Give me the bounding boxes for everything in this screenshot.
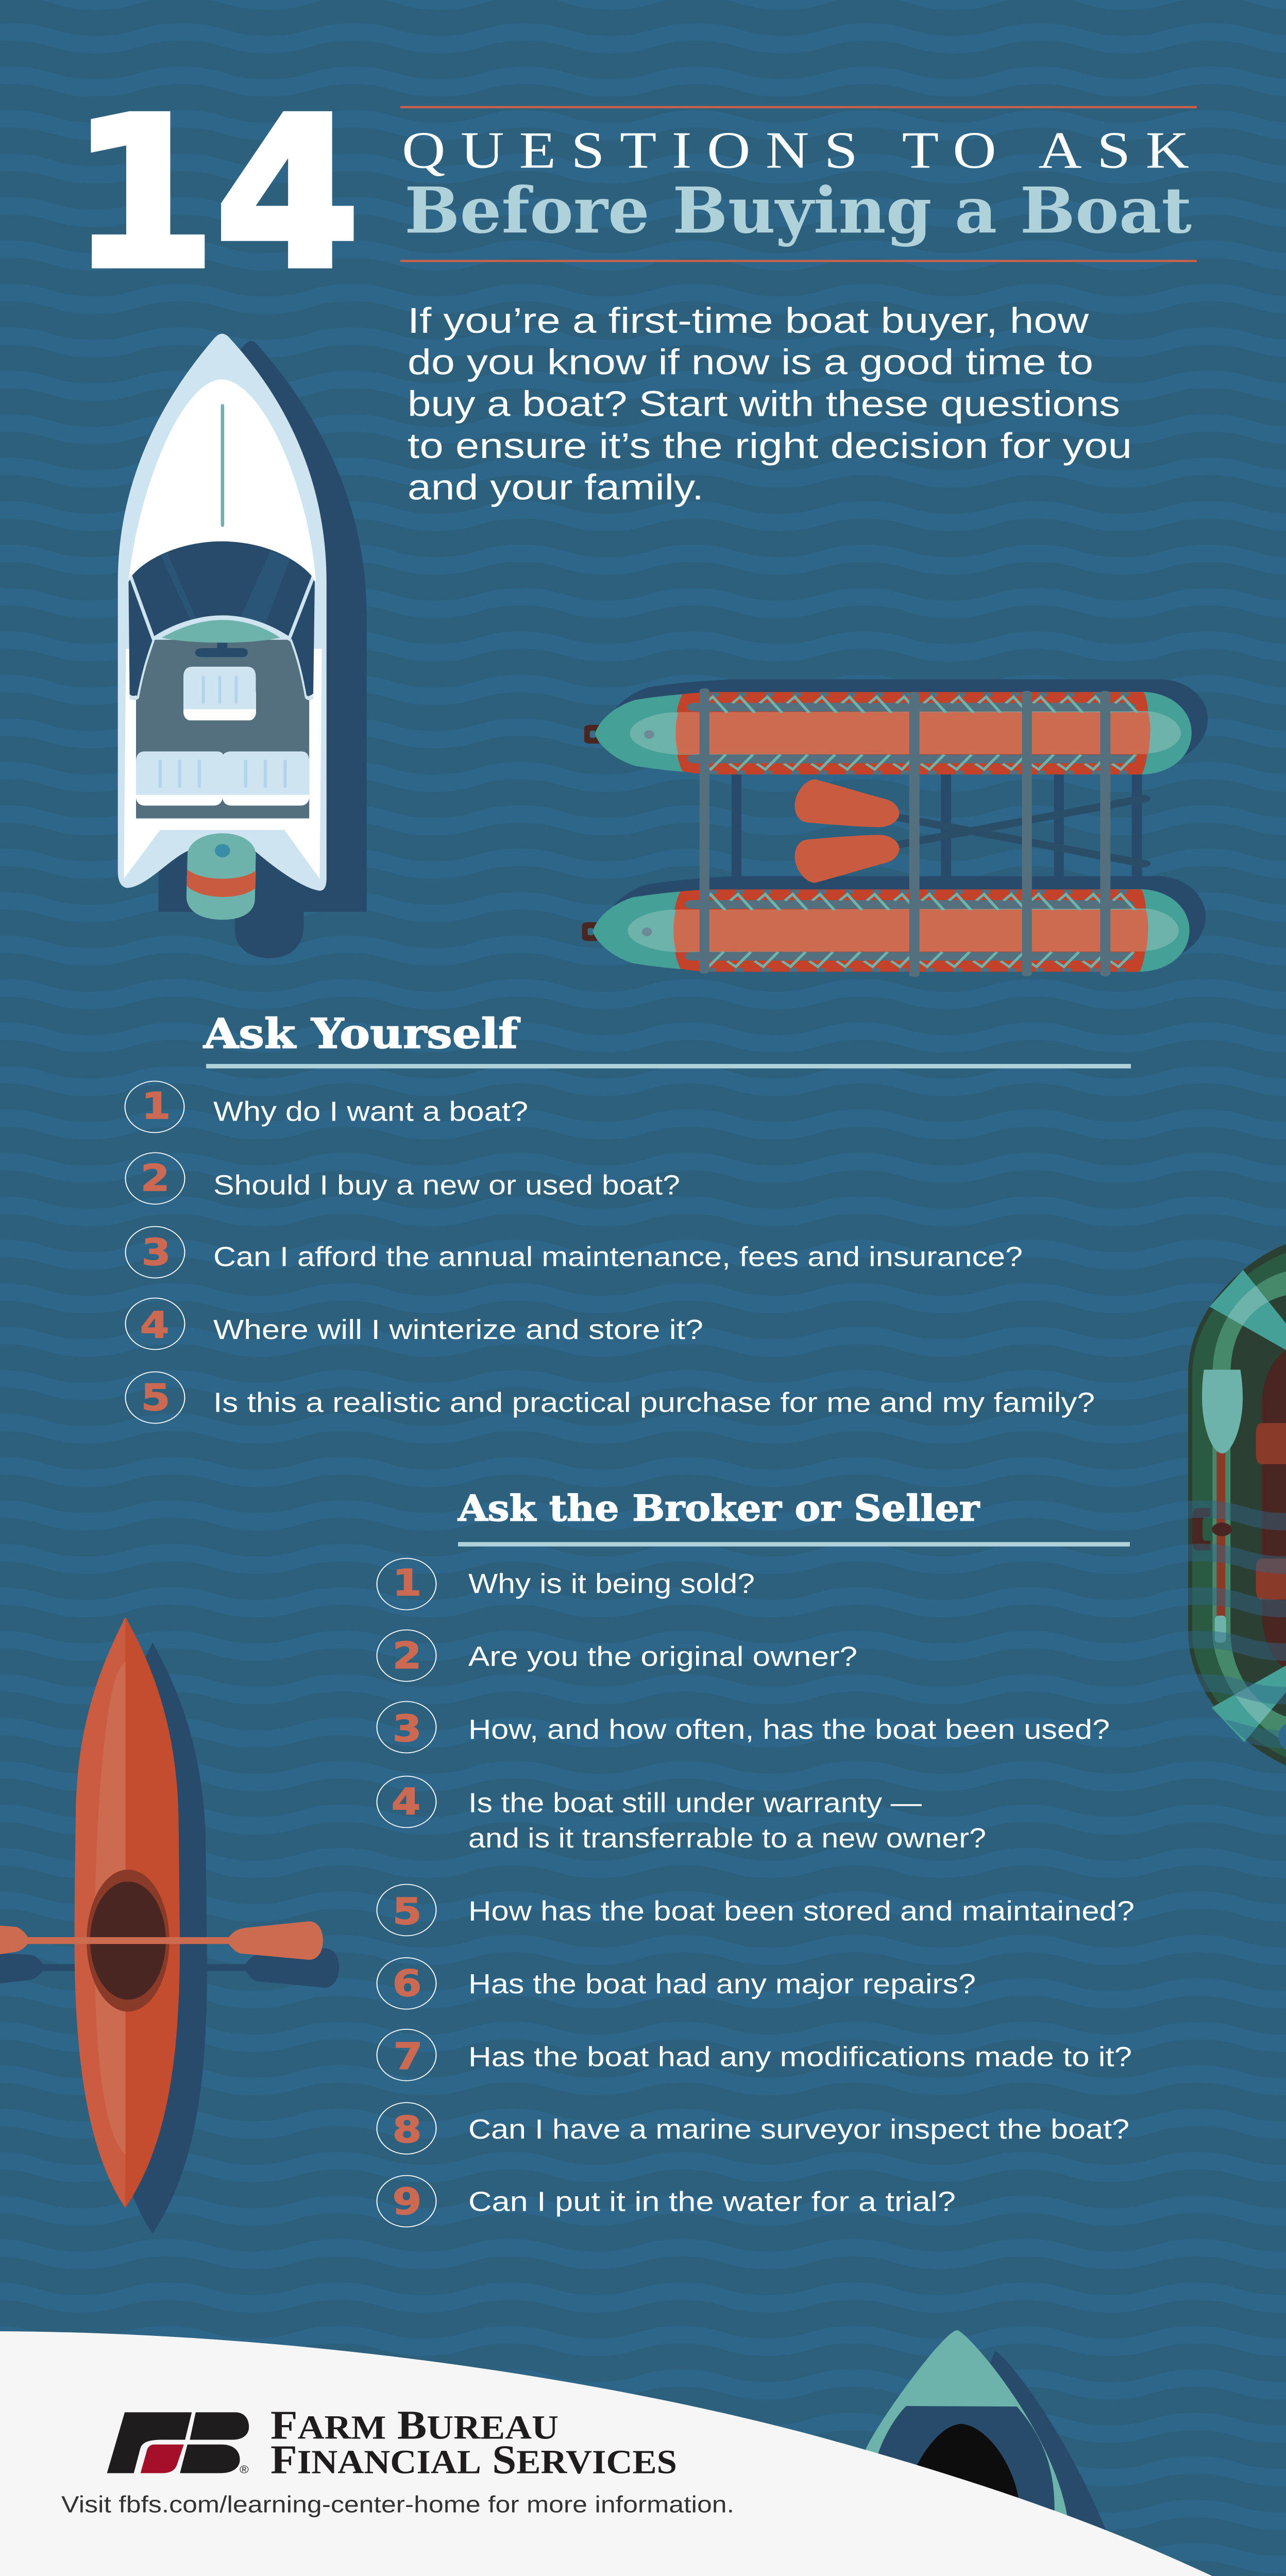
list: Ask Yourself questions: 3 [142,1231,171,1274]
illustration: green raft at right edge [1188,1244,1286,1766]
big number 14: 14 [71,74,360,313]
intro text block: do you know if now is a good time to [408,342,1093,382]
heading: Ask Yourself: Ask Yourself [203,1010,520,1058]
illustration: speedboat [118,334,367,958]
list: Ask the Broker or Seller questions: How, and how often, has the boat been used? [468,1714,1110,1745]
intro text block: and your family. [408,467,704,507]
list: Ask the Broker or Seller questions: Is the boat still under warranty — [468,1787,922,1818]
title [71,74,1197,313]
list: Ask the Broker or Seller questions: Why is it being sold? [468,1568,755,1599]
list: Ask Yourself questions: Where will I winterize and store it? [213,1314,703,1345]
list: Ask the Broker or Seller questions: 3 [393,1707,421,1750]
list: Ask Yourself questions [125,1081,1095,1423]
list: Ask the Broker or Seller questions: Can I put it in the water for a trial? [468,2186,956,2217]
company name: FINANCIAL SERVICES [270,2437,677,2482]
intro text block: buy a boat? Start with these questions [408,383,1120,423]
intro text block: If you’re a first-time boat buyer, how [408,300,1089,341]
bottom rule [400,260,1197,262]
raft shadows [614,679,1208,953]
list: Ask the Broker or Seller questions: Can I have a marine surveyor inspect the boat? [468,2114,1129,2145]
company name: FARM BUREAU [270,2403,559,2448]
illustration: inflatable raft [582,679,1208,977]
list: Ask the Broker or Seller questions [377,1558,1135,2227]
list: Ask the Broker or Seller questions: Has the boat had any major repairs? [468,1969,976,1999]
company name [270,2403,677,2482]
list: Ask the Broker or Seller questions: 7 [394,2036,422,2077]
kayak hull [75,1617,180,2208]
lower float [582,889,1190,972]
list: Ask the Broker or Seller questions: Has the boat had any modifications made to it? [468,2041,1132,2072]
list: Ask the Broker or Seller questions: 4 [392,1781,420,1823]
list: Ask the Broker or Seller questions: 1 [393,1562,421,1604]
list: Ask the Broker or Seller questions: 2 [393,1635,421,1677]
list: Ask Yourself questions: 4 [140,1304,169,1346]
intro text block: to ensure it’s the right decision for you [408,426,1132,466]
footer panel [0,2331,1212,2576]
heading rule: Ask the Broker or Seller [458,1542,1130,1547]
paddles [795,779,1144,883]
intro text block [408,300,1132,507]
paddle shadow [0,1948,339,1988]
website line: Visit fbfs.com/learning-center-home for more information. [61,2492,734,2518]
list: Ask the Broker or Seller questions: How has the boat been stored and maintained? [468,1895,1135,1926]
top rule [400,106,1197,108]
title line 1: QUESTIONS TO ASK [402,121,1189,179]
list: Ask Yourself questions: 1 [142,1085,171,1127]
heading rule: Ask Yourself [206,1064,1131,1069]
registered mark: ® [240,2464,249,2476]
list: Ask Yourself questions: Should I buy a new or used boat? [213,1170,680,1201]
illustration: teal boat at bottom [853,2330,1107,2575]
list: Ask Yourself questions: Is this a realistic and practical purchase for me and my family? [213,1387,1095,1418]
list: Ask Yourself questions: 5 [141,1377,170,1419]
raft frame bars [700,688,1110,977]
paddle [0,1921,323,1960]
list: Ask the Broker or Seller questions: 8 [393,2109,421,2151]
illustration: kayak with paddle [0,1617,339,2233]
list: Ask the Broker or Seller questions: 9 [393,2181,421,2223]
list: Ask the Broker or Seller questions: and is it transferrable to a new owner? [468,1823,986,1854]
title line 2: Before Buying a Boat [404,174,1192,248]
list: Ask the Broker or Seller questions: 5 [393,1890,421,1933]
upper float [584,692,1192,774]
list: Ask the Broker or Seller questions: Are you the original owner? [468,1641,857,1672]
list: Ask Yourself questions: 2 [141,1157,170,1199]
kayak shadow [101,1642,207,2233]
logo mark [107,2412,249,2473]
list: Ask Yourself questions: Can I afford the annual maintenance, fees and insurance? [213,1241,1023,1273]
list: Ask Yourself questions: Why do I want a boat? [213,1096,528,1127]
list: Ask the Broker or Seller questions: 6 [393,1962,421,2005]
heading: Ask the Broker or Seller: Ask the Broker or Seller [458,1487,980,1529]
kayak cockpit [87,1870,170,2012]
